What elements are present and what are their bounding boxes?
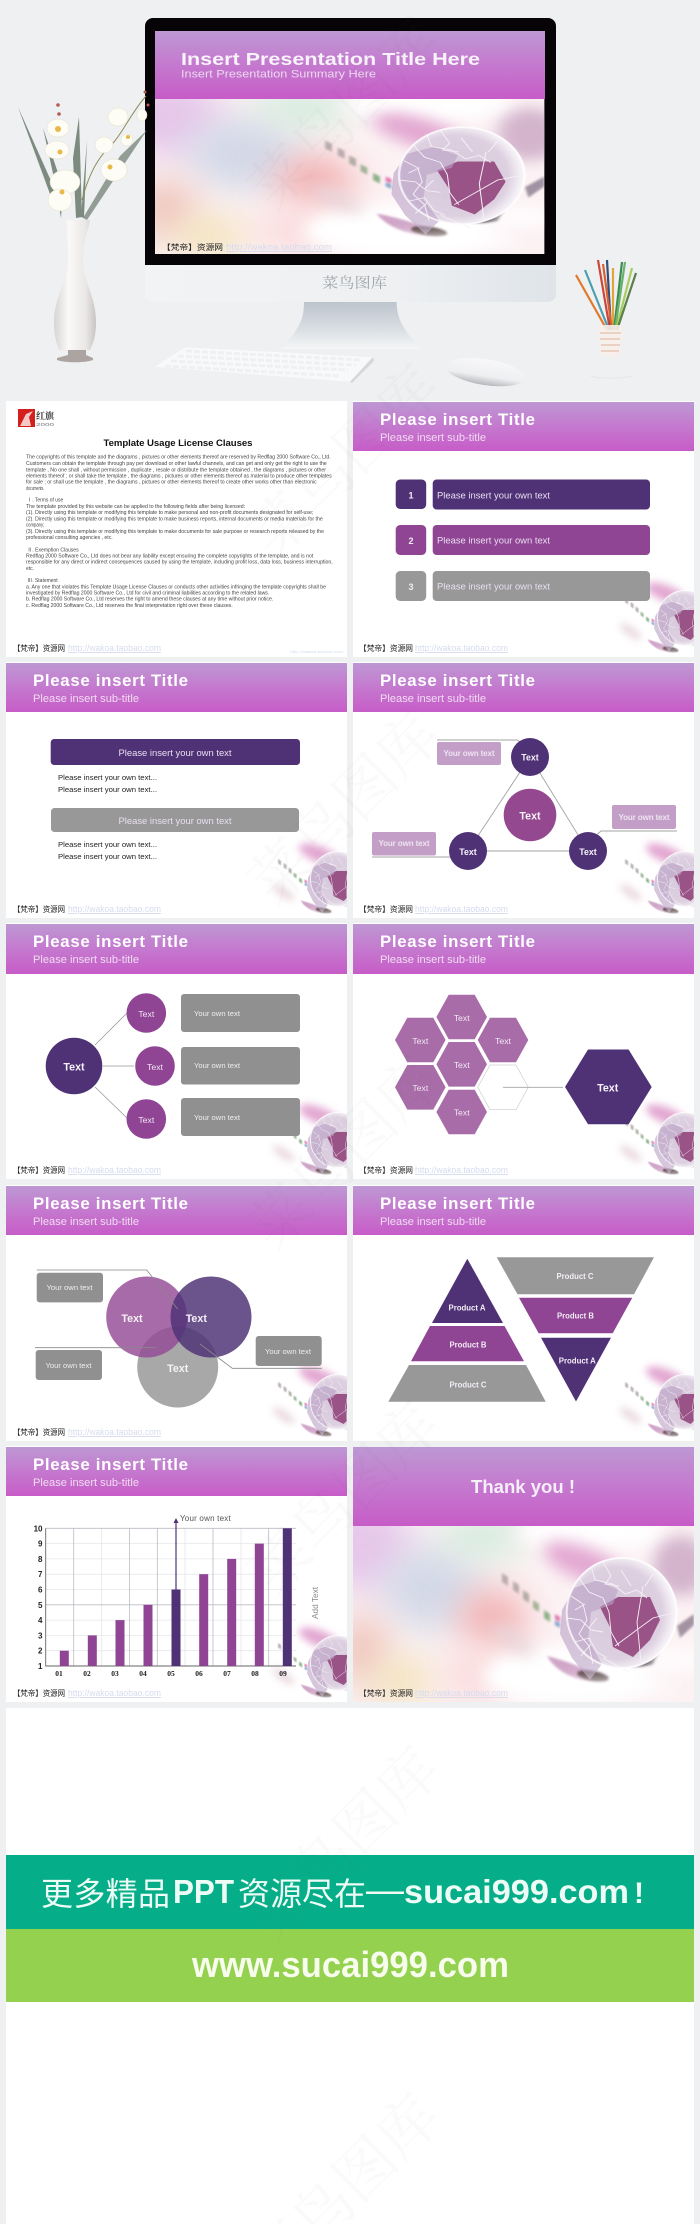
green banner: PPT [173, 1873, 234, 1910]
inverted layer A [541, 1338, 611, 1402]
connectors [95, 1013, 134, 1118]
slide 3: two bars with text [6, 662, 382, 920]
inverted layer C [497, 1257, 654, 1294]
header: Please insert Title [33, 671, 188, 690]
header: Please insert sub-title [33, 693, 139, 705]
header: Please insert sub-title [33, 954, 139, 966]
leaves [18, 107, 147, 220]
text box bottom left [36, 1350, 102, 1380]
header [6, 1447, 347, 1496]
footer: http://wakoa.taobao.com [68, 904, 161, 914]
venn labels: Text [186, 1313, 207, 1325]
screen: title slide [109, 31, 562, 258]
callout left [372, 832, 436, 856]
top circle [511, 738, 549, 776]
logo: 红旗 [36, 409, 55, 422]
green banner: sucai999.com [404, 1873, 629, 1910]
empty hexagon with connector [478, 1065, 563, 1110]
license body text: investigated by Redflag 2000 Software Co., Ltd for civil and criminal liabilities according to the related laws. [26, 591, 269, 597]
footer: http://wakoa.taobao.com [68, 1688, 161, 1698]
footer [13, 1427, 161, 1437]
footer: 【梵帝】资源网 [13, 904, 65, 914]
license body text: Ⅰ. Terms of use [27, 498, 63, 504]
text box 2 [181, 1047, 300, 1084]
header: Please insert sub-title [380, 954, 486, 966]
hexagon lower left: Text [412, 1083, 429, 1093]
leader lines [35, 1270, 322, 1368]
branch circle 2: Text [147, 1062, 164, 1072]
text box 3: Your own text [194, 1113, 241, 1122]
branch circle 1: Text [138, 1009, 155, 1019]
hexagon upper right: Text [495, 1036, 512, 1046]
slide 6: hexagon diagram [353, 923, 700, 1180]
x axis labels [55, 1669, 287, 1678]
text box top left [37, 1273, 103, 1302]
watermark [226, 0, 457, 2224]
watermark: 菜鸟图库 [226, 0, 457, 227]
license body text: responsible for any direct or indirect consequences caused by using the template, including profit loss, data loss, business interruption, [26, 560, 333, 566]
x axis labels: 05 [167, 1669, 175, 1678]
license body text: company; [26, 523, 44, 529]
purple circle [106, 1276, 187, 1358]
callout left: Your own text [378, 839, 430, 848]
hexagon top: Text [454, 1013, 470, 1023]
center circle: Text [519, 810, 541, 822]
pyramid layer C [388, 1365, 546, 1402]
connectors [372, 740, 677, 857]
license body text: Customers can obtain the template through pay per download or other lawful channels, and can get and only get the right to use the [26, 461, 327, 467]
footer: http://wakoa.taobao.com [68, 1427, 161, 1437]
header: Please insert Title [380, 671, 535, 690]
license body text [26, 455, 333, 609]
watermark: 菜鸟图库 [226, 1725, 457, 1956]
footer [13, 1165, 161, 1175]
pyramid layer A: Product A [448, 1304, 486, 1313]
header [353, 924, 694, 974]
license body text: c. Redflag 2000 Software Co., Ltd reserves the final interpretation right over these clauses. [26, 603, 233, 609]
green banner: 更多精品 [41, 1869, 170, 1915]
bars [60, 1528, 292, 1666]
header [353, 1186, 694, 1235]
branch circle 3 [126, 1099, 166, 1139]
hexagon lower left [395, 1065, 446, 1110]
list item 2 [396, 525, 650, 555]
header [6, 1186, 347, 1235]
vase base [57, 350, 93, 362]
chart [34, 1524, 296, 1678]
license body text: The template provided by this website can be applied to the following fields after being licensed: [26, 504, 245, 510]
branch circle 1 [126, 993, 166, 1033]
header: Please insert sub-title [380, 693, 486, 705]
inverted layer B: Product B [557, 1312, 594, 1321]
list item 2: 2 [408, 536, 414, 546]
y axis labels: 6 [38, 1586, 43, 1594]
footer: http://wakoa.taobao.com [290, 650, 343, 654]
text box 1 [181, 994, 300, 1032]
license body text: (1). Directly using this template or modifying this template to make personal and non-profit documents designated for self-use; [26, 510, 313, 516]
footer: http://wakoa.taobao.com [68, 643, 161, 653]
footer: http://wakoa.taobao.com [68, 1165, 161, 1175]
y axis labels: 1 [38, 1662, 43, 1671]
footer: 【梵帝】资源网 [359, 643, 413, 653]
screen: title slide: http://wakoa.taobao.com [226, 242, 332, 252]
inverted layer A: Product A [559, 1357, 596, 1366]
list item 1: Please insert your own text [437, 490, 550, 500]
hexagon center [436, 1042, 487, 1087]
list item 1: 1 [408, 490, 414, 500]
text lines 2 [58, 840, 157, 861]
arrow annotation: Your own text [180, 1514, 231, 1523]
slide 8: pyramids [353, 1185, 700, 1442]
venn labels: Text [167, 1363, 189, 1375]
license body text: The copyrights of this template and the diagrams , pictures or other elements thereof are reserved by Redflag 2000 Software Co., Ltd. [26, 455, 331, 461]
y axis labels: 2 [38, 1647, 43, 1656]
license body text: b. Redflag 2000 Software Co., Ltd reserves the right to amend these clauses at any time without prior notice. [26, 597, 273, 603]
branch circle 3: Text [138, 1115, 155, 1125]
text lines 1 [58, 773, 157, 794]
y axis labels: 4 [38, 1616, 43, 1625]
header: Please insert sub-title [33, 1477, 139, 1489]
x axis labels: 03 [111, 1669, 119, 1678]
photo background [313, 1501, 700, 1706]
text box right: Your own text [265, 1347, 312, 1356]
text lines 2: Please insert your own text... [58, 852, 157, 861]
slide 2: numbered list [353, 401, 700, 658]
watermark: 菜鸟图库 [226, 1035, 457, 1266]
left circle: Text [459, 847, 477, 857]
slide 4: triangle cycle diagram [353, 662, 700, 920]
screen: title slide: Insert Presentation Title Here [181, 49, 480, 69]
inverted layer C: Product C [556, 1272, 594, 1281]
y axis labels: 8 [38, 1555, 43, 1564]
dark circle [170, 1276, 252, 1358]
license body text: elements thereof ; or shall take the template , the diagrams , pictures or other elements thereof as material to produce other templates [26, 473, 332, 479]
footer [13, 1688, 161, 1698]
hexagon upper right [478, 1018, 528, 1062]
x axis labels: 08 [251, 1669, 259, 1678]
blossoms [45, 108, 147, 211]
header [353, 663, 694, 712]
footer [13, 643, 343, 654]
hexagon bottom [436, 1090, 487, 1134]
footer: 【梵帝】资源网 [359, 1688, 413, 1698]
license body text: Ⅱ. Exemption Clauses [27, 547, 79, 553]
footer: 【梵帝】资源网 [359, 904, 413, 914]
dark bar [51, 739, 300, 765]
license title: Template Usage License Clauses [104, 438, 252, 449]
dark bar: Please insert your own text [118, 747, 232, 758]
text box 3 [181, 1098, 300, 1136]
top circle: Text [521, 753, 539, 763]
pencils [576, 260, 636, 330]
y axis labels: 7 [38, 1570, 43, 1579]
list item 3 [396, 571, 650, 601]
x axis labels: 07 [223, 1669, 231, 1678]
logo: 2000 [36, 422, 55, 427]
pyramid layer C: Product C [450, 1381, 487, 1390]
footer [359, 643, 508, 653]
green banner [6, 1855, 694, 1929]
footer [13, 904, 161, 914]
footer [359, 904, 508, 914]
screen: title slide: Insert Presentation Summary Here [181, 68, 376, 80]
left circle [449, 832, 487, 870]
gray circle [137, 1326, 218, 1408]
hexagon upper left: Text [412, 1036, 429, 1046]
hexagon upper left [395, 1018, 446, 1062]
center circle [504, 789, 556, 841]
header: Please insert Title [380, 1194, 535, 1213]
vase body [54, 220, 96, 350]
list item 2: Please insert your own text [437, 534, 550, 546]
x axis labels: 01 [55, 1669, 63, 1678]
lime banner [6, 1929, 694, 2002]
right circle [569, 832, 607, 870]
gray bar: Please insert your own text [118, 815, 232, 826]
venn labels [121, 1313, 207, 1375]
list item 3: Please insert your own text [437, 580, 550, 592]
mouse [443, 353, 527, 391]
inverted layer B [519, 1298, 632, 1333]
footer: 【梵帝】资源网 [13, 1688, 65, 1698]
y axis labels: 5 [38, 1601, 43, 1610]
monitor bezel [145, 18, 556, 265]
callout right [612, 805, 676, 829]
pencil cup [576, 260, 636, 378]
large hexagon: Text [597, 1083, 619, 1095]
header band [353, 1447, 694, 1526]
slide 1: license clauses [6, 401, 347, 657]
y axis labels: 3 [38, 1631, 43, 1640]
vase with orchid flowers [18, 90, 150, 362]
slide 7: venn diagram [6, 1185, 382, 1442]
branch circle 2 [135, 1046, 175, 1086]
promo panel [6, 1708, 694, 2224]
footer [359, 1165, 508, 1175]
header: Please insert sub-title [33, 1216, 139, 1228]
text box top left: Your own text [46, 1283, 93, 1292]
callout top [437, 742, 501, 765]
callout right: Your own text [618, 813, 670, 822]
monitor chin with brand text [145, 265, 556, 302]
monitor stand [282, 302, 420, 349]
header [6, 663, 347, 712]
pyramid layer B: Product B [450, 1341, 487, 1350]
watermark: 菜鸟图库 [226, 690, 457, 921]
list item 3: 3 [408, 582, 414, 592]
footer: http://wakoa.taobao.com [415, 904, 508, 914]
footer [359, 1688, 508, 1698]
watermark: 菜鸟图库 [226, 1380, 457, 1611]
footer: 【梵帝】资源网 [13, 643, 65, 653]
monitor mockup scene [109, 18, 562, 349]
header: Please insert Title [380, 410, 535, 429]
venn labels: Text [121, 1313, 143, 1325]
text lines 2: Please insert your own text... [58, 840, 157, 849]
license body text: Ⅲ. Statement [27, 578, 58, 584]
footer: 【梵帝】资源网 [13, 1427, 65, 1437]
pyramid layer B [411, 1326, 524, 1361]
thank you heading: Thank you ! [471, 1476, 575, 1497]
text box 2: Your own text [194, 1061, 241, 1070]
x axis labels: 02 [83, 1669, 91, 1678]
root circle: Text [63, 1062, 85, 1074]
hexagon bottom: Text [454, 1108, 470, 1118]
footer: http://wakoa.taobao.com [415, 1688, 508, 1698]
inverted pyramid [497, 1257, 654, 1402]
watermark: 菜鸟图库 [226, 343, 457, 574]
license body text: (3). Directly using this template or modifying this template to make documents for sale purpose or research reports released by the [26, 529, 324, 535]
right circle: Text [579, 847, 597, 857]
license body text: professional consulting agencies , etc. [26, 535, 113, 541]
monitor chin with brand text: 菜鸟图库 [322, 272, 387, 293]
header: Please insert sub-title [380, 1216, 486, 1228]
header: Please insert Title [380, 932, 535, 951]
text box 1: Your own text [194, 1009, 241, 1018]
logo [18, 409, 55, 427]
lime banner: www.sucai999.com [191, 1944, 509, 1985]
footer: http://wakoa.taobao.com [415, 643, 508, 653]
license body text: a. Any one that violates this Template Usage License Clauses or conducts other activities infringing the template copyrights shall be [26, 584, 326, 590]
y axis labels [34, 1524, 43, 1671]
callout top: Your own text [444, 749, 495, 758]
green banner: ! [634, 1877, 644, 1910]
header: Please insert sub-title [380, 432, 486, 444]
license body text: Redflag 2000 Software Co., Ltd does not bear any liability except ensuring the complete copyrights of the template, and is not [26, 553, 314, 559]
x axis labels: 09 [279, 1669, 287, 1678]
arrow annotation [174, 1514, 231, 1590]
text box right [256, 1336, 322, 1366]
y axis labels: 9 [38, 1540, 43, 1549]
header [6, 924, 347, 974]
text lines 1: Please insert your own text... [58, 773, 157, 782]
list item 1 [396, 480, 650, 510]
license body text: for sale ; or shall use the template , the diagrams , pictures or other elements thereof to create other works other than electronic [26, 479, 317, 485]
header: Please insert Title [33, 1194, 188, 1213]
footer: http://wakoa.taobao.com [415, 1165, 508, 1175]
large hexagon [565, 1050, 652, 1124]
footer: 【梵帝】资源网 [13, 1165, 65, 1175]
cup [598, 325, 623, 357]
screen: title slide: 【梵帝】资源网 [162, 242, 223, 252]
x axis labels: 04 [139, 1669, 147, 1678]
license body text: etc. [26, 566, 34, 572]
footer: 【梵帝】资源网 [359, 1165, 413, 1175]
hexagon center: Text [454, 1060, 470, 1070]
root circle [46, 1038, 102, 1094]
header [353, 402, 694, 451]
branch [82, 96, 146, 200]
green banner: 资源尽在 [238, 1869, 366, 1915]
slide 9: bar chart [6, 1446, 382, 1704]
gray bar [51, 808, 299, 832]
slide 10: thank you [313, 1447, 700, 1706]
keyboard [154, 347, 374, 383]
vertical label: Add Text [311, 1586, 320, 1619]
license body text: documents. [26, 486, 44, 492]
x axis labels: 06 [195, 1669, 203, 1678]
y axis labels: 10 [34, 1524, 43, 1533]
header: Please insert Title [33, 1455, 188, 1474]
license body text: (2). Directly using this template or modifying this template to make business reports, internal documents or media materials for the [26, 516, 323, 522]
pyramid [388, 1259, 546, 1402]
text box bottom left: Your own text [46, 1361, 92, 1370]
header: Please insert Title [33, 932, 188, 951]
pyramid layer A [432, 1259, 503, 1323]
license body text: template , No one shall , without permission , duplicate , resale or distribute the template obtained , the diagrams , pictures or other [26, 467, 326, 473]
hexagon top [436, 995, 487, 1039]
text lines 1: Please insert your own text... [58, 785, 157, 794]
slide 5: tree diagram [6, 923, 382, 1180]
